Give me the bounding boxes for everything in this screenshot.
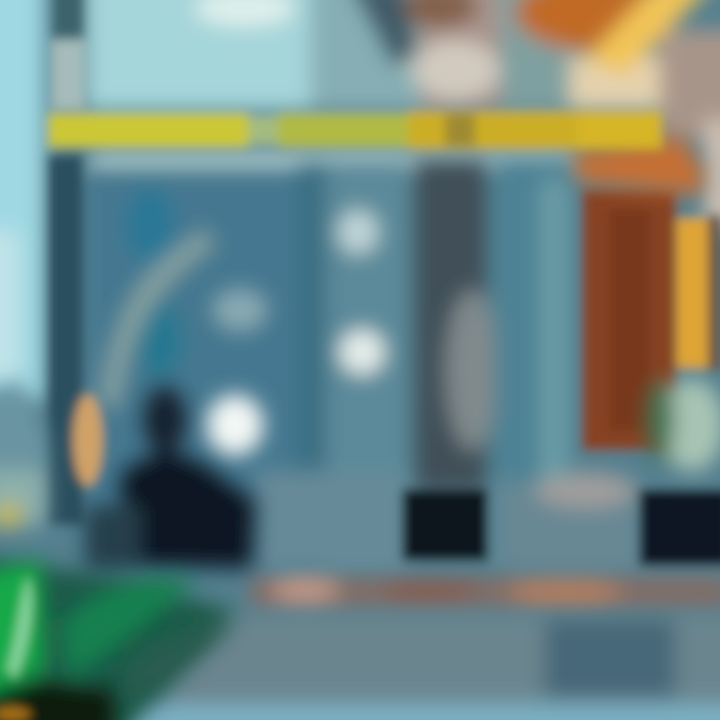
band under yellow stripe xyxy=(90,150,580,174)
distant landscape at left xyxy=(0,380,46,530)
dark foreground at bottom left xyxy=(0,555,235,720)
blue building facade xyxy=(85,165,410,570)
yellow column xyxy=(676,215,720,370)
upper building and warm ceiling xyxy=(350,0,720,230)
dark seated figure xyxy=(85,386,255,570)
wood panel xyxy=(582,190,676,450)
plant on right xyxy=(646,378,720,471)
yellow horizontal stripe xyxy=(48,111,662,149)
bright lamp xyxy=(207,395,263,455)
paved floor xyxy=(125,615,720,720)
orange ceiling beam xyxy=(572,135,705,195)
left dark pillar xyxy=(47,0,103,525)
black planter right xyxy=(640,490,720,565)
black planter centre xyxy=(403,490,487,560)
warm floor reflection strip xyxy=(250,576,720,606)
pale highlight on leaf xyxy=(0,575,33,720)
dark central column xyxy=(415,160,577,560)
sky xyxy=(0,0,430,400)
green plant leaves xyxy=(0,560,235,720)
lower glass and lobby xyxy=(255,470,640,570)
